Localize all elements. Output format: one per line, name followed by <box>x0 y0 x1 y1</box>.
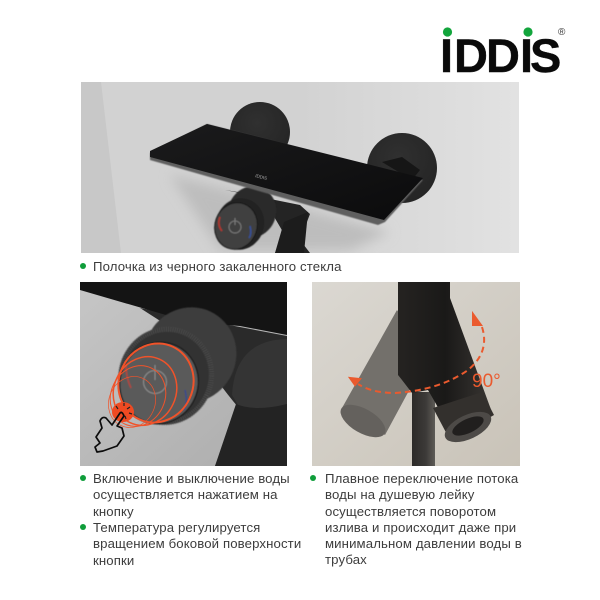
knob <box>118 307 236 426</box>
bullet text: shelf: Полочка из черного закаленного стекла <box>93 259 342 274</box>
bullet text: spout switching: Плавное переключение потока <box>325 471 518 486</box>
label: 90 degrees: 90° <box>472 371 501 392</box>
logo: IDDIS: S <box>530 29 561 82</box>
rotation arrow <box>358 327 484 393</box>
aerator <box>444 412 492 442</box>
bullet text: spout switching: минимальном давлении воды в <box>325 536 522 551</box>
photo: swivel spout <box>312 282 520 466</box>
shadow under shelf <box>170 175 390 250</box>
photo: shelf mixer: IDDIS <box>255 173 268 181</box>
photo: shelf mixer <box>81 82 519 257</box>
ghost spout position <box>342 310 412 435</box>
spout lower cylinder <box>433 396 494 432</box>
knurled control knob <box>213 187 276 250</box>
spout body <box>398 282 492 410</box>
logo: IDDIS: ® <box>558 27 566 38</box>
wall rosette left <box>230 102 290 144</box>
bullet text: button control: осуществляется нажатием на <box>93 487 278 502</box>
logo: IDDIS: D <box>454 29 488 82</box>
glass shelf <box>150 124 423 225</box>
logo: IDDIS: I <box>440 29 453 82</box>
bullet text: spout switching: осуществляется поворотом <box>325 504 496 519</box>
bullet text: button control: вращением боковой поверхности <box>93 536 301 551</box>
icon: hand pointer <box>95 412 124 452</box>
wall rosette right <box>367 133 437 203</box>
bullet text: button control: кнопки <box>93 553 134 568</box>
bullet text: button control: кнопку <box>93 504 134 519</box>
vertical hose <box>412 392 435 466</box>
mixer body and spout <box>225 190 310 253</box>
photos <box>80 82 520 466</box>
bullet text: spout switching: трубах <box>325 552 367 567</box>
press point <box>112 402 134 422</box>
bullet text: spout switching: излива и происходит даже при <box>325 520 516 535</box>
orange ripple rings <box>108 342 195 428</box>
bullet text: button control: Включение и выключение воды <box>93 471 290 486</box>
bullet text: spout switching: воды на душевую лейку <box>325 487 475 502</box>
bullet text: spout switching <box>310 471 522 567</box>
glass shelf edge <box>80 282 287 335</box>
bullet text: button control: Температура регулируется <box>93 520 260 535</box>
mixer body <box>140 308 287 466</box>
logo: IDDIS: D <box>486 29 520 82</box>
logo: IDDIS: I <box>520 29 533 82</box>
photo: control button <box>80 282 287 466</box>
logo: IDDIS <box>440 27 566 82</box>
bullet text: button control <box>80 471 301 568</box>
